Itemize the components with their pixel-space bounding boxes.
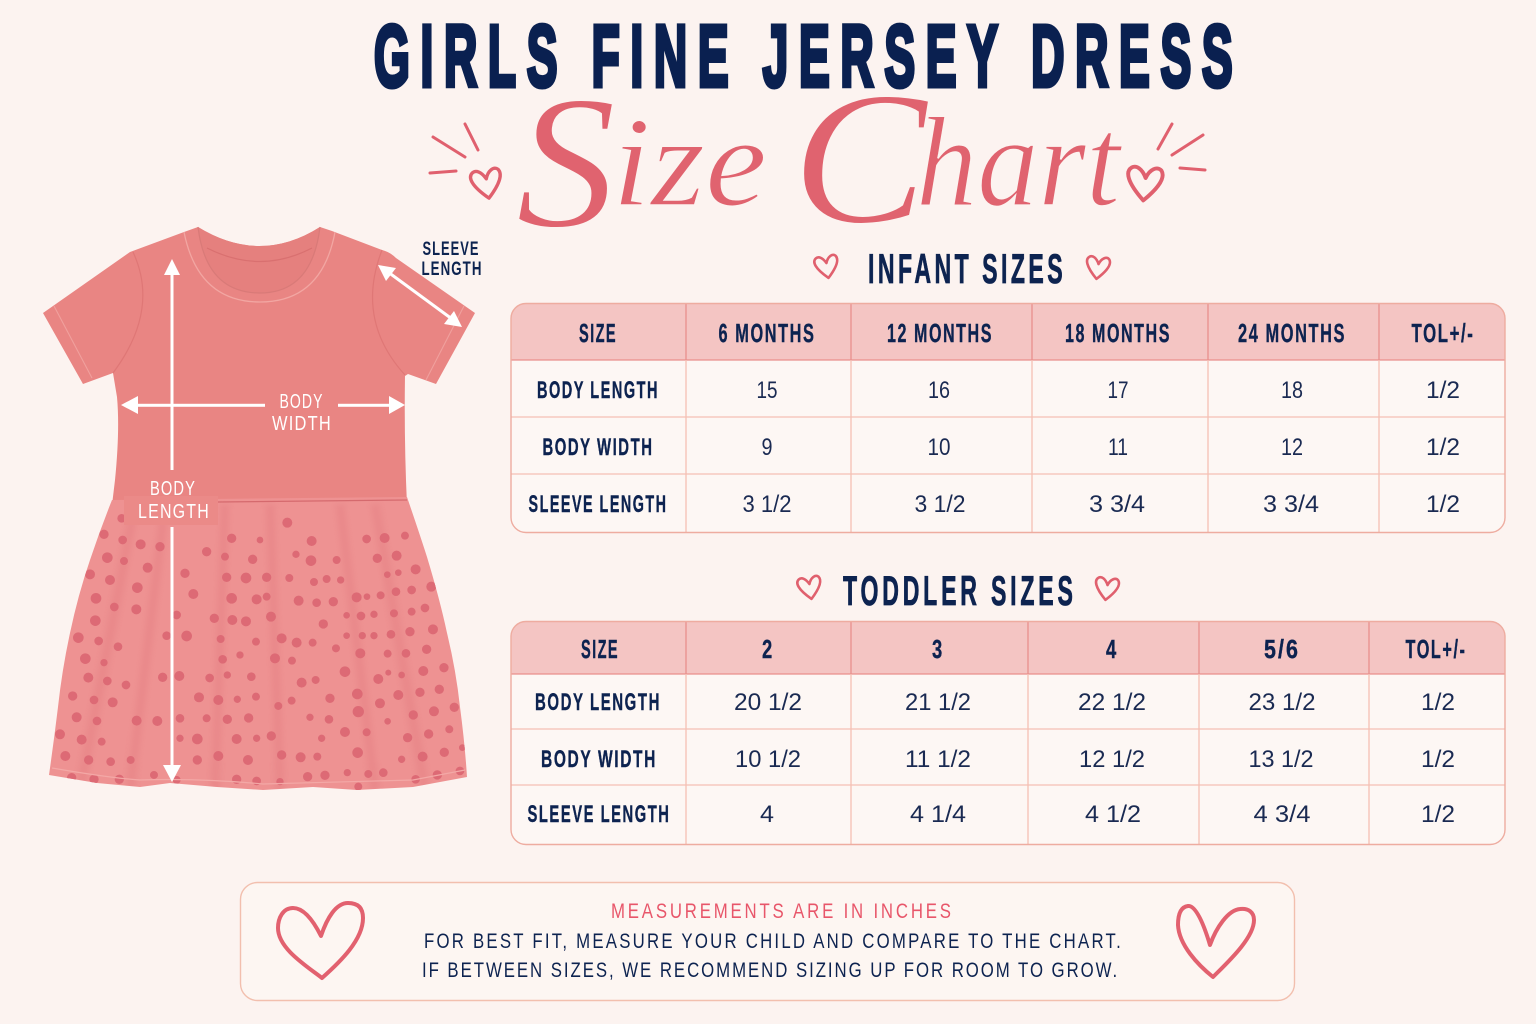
row: sleeve length: 3 3/4 <box>1263 491 1319 518</box>
icon: left sparkle strokes and heart <box>430 124 503 200</box>
row: body length: 22 1/2 <box>1078 689 1146 716</box>
subtitle: Size Chart: C <box>792 54 929 264</box>
icon: left large heart <box>278 903 363 978</box>
icon: heart left of infant heading <box>814 254 840 280</box>
header row: SIZE <box>581 634 619 664</box>
row: sleeve length <box>528 491 1460 518</box>
row: body length: 20 1/2 <box>734 689 802 716</box>
skirt folds <box>80 538 425 786</box>
title: GIRLS FINE JERSEY DRESS <box>374 7 1233 105</box>
row: sleeve length: 4 1/2 <box>1085 801 1141 828</box>
neck interior <box>198 227 320 293</box>
row: body width: 1/2 <box>1426 434 1460 461</box>
row: body length: BODY LENGTH <box>537 377 659 404</box>
row: body length: 18 <box>1281 377 1303 404</box>
row: body width <box>541 746 1455 773</box>
header row: TOL+/- <box>1406 634 1466 664</box>
header row: 5/6 <box>1264 634 1300 664</box>
row: sleeve length: 4 <box>760 801 774 828</box>
header row: 2 <box>762 634 774 664</box>
heading: toddler sizes: TODDLER SIZES <box>843 568 1073 615</box>
subtitle: Size Chart: S <box>516 58 616 268</box>
row: body width: 10 <box>928 434 950 461</box>
table: infant sizes <box>511 304 1505 532</box>
row: body width <box>542 434 1460 461</box>
row: body length: 1/2 <box>1421 689 1455 716</box>
table: toddler sizes <box>511 622 1505 844</box>
row: body width: BODY WIDTH <box>542 434 654 461</box>
skirt waist seam and hem stitch <box>218 500 407 502</box>
dress illustration <box>43 227 475 790</box>
row: sleeve length: 1/2 <box>1426 491 1460 518</box>
label: sleeve length: LENGTH <box>422 259 482 280</box>
row: body length: 16 <box>928 377 950 404</box>
row: body length: BODY LENGTH <box>535 689 661 716</box>
header row: 6 MONTHS <box>718 318 816 348</box>
sleeve seams <box>113 250 405 375</box>
header row: 18 MONTHS <box>1065 318 1171 348</box>
label: sleeve length: SLEEVE <box>422 239 480 260</box>
note headline: MEASUREMENTS ARE IN INCHES <box>611 900 951 924</box>
header row: 24 MONTHS <box>1238 318 1346 348</box>
row: sleeve length: 1/2 <box>1421 801 1455 828</box>
icon: right sparkle strokes and heart <box>1126 124 1205 202</box>
label: body width: WIDTH <box>272 413 332 435</box>
row: body width: 11 1/2 <box>905 746 971 773</box>
row: body width: BODY WIDTH <box>541 746 657 773</box>
icon: heart left of toddler heading <box>797 575 823 601</box>
icon: heart right of infant heading <box>1085 255 1111 280</box>
row: body width: 9 <box>762 434 772 461</box>
callout: measurement note <box>240 882 1294 1000</box>
header row <box>579 318 1474 348</box>
arrow: sleeve length diagonal <box>378 265 462 327</box>
row: sleeve length: 3 3/4 <box>1089 491 1145 518</box>
row: sleeve length: 4 1/4 <box>910 801 966 828</box>
row: body length: 21 1/2 <box>905 689 971 716</box>
subtitle: Size Chart: hart <box>916 91 1123 233</box>
header row: SIZE <box>579 318 617 348</box>
row: body width: 10 1/2 <box>735 746 801 773</box>
header row: TOL+/- <box>1412 318 1474 348</box>
row: body width: 13 1/2 <box>1248 746 1314 773</box>
label: sleeve length <box>422 239 482 280</box>
row: sleeve length: 4 3/4 <box>1254 801 1310 828</box>
row: body width: 11 <box>1108 434 1128 461</box>
polka dots <box>56 515 465 790</box>
row: body length: 17 <box>1108 377 1128 404</box>
label: body width <box>272 391 332 435</box>
row: body length <box>535 689 1455 716</box>
icon: heart right of toddler heading <box>1094 576 1120 601</box>
arrow: body length vertical <box>163 259 181 782</box>
row: body length <box>537 377 1460 404</box>
subtitle: Size Chart: ize <box>612 91 767 233</box>
label: body length <box>138 478 210 523</box>
label patch <box>124 496 218 525</box>
row: sleeve length: 3 1/2 <box>914 491 966 518</box>
header row: 3 <box>932 634 944 664</box>
icon: right large heart <box>1178 906 1254 977</box>
row: sleeve length: SLEEVE LENGTH <box>528 491 668 518</box>
header row: 12 MONTHS <box>887 318 993 348</box>
row: body width: 1/2 <box>1421 746 1455 773</box>
skirt <box>49 497 467 790</box>
row: sleeve length: SLEEVE LENGTH <box>528 801 670 828</box>
row: body width: 12 <box>1281 434 1303 461</box>
row: sleeve length <box>528 801 1455 828</box>
heading: infant sizes: INFANT SIZES <box>868 246 1063 293</box>
arrow: body width horizontal <box>121 396 405 414</box>
label: body width: BODY <box>280 391 324 413</box>
header row <box>581 634 1466 664</box>
row: body width: 12 1/2 <box>1079 746 1145 773</box>
header row: 4 <box>1106 634 1118 664</box>
note line one: FOR BEST FIT, MEASURE YOUR CHILD AND COMPARE TO THE CHART. <box>424 930 1121 954</box>
row: body length: 1/2 <box>1426 377 1460 404</box>
label: body length: BODY <box>150 478 196 500</box>
row: body length: 23 1/2 <box>1248 689 1316 716</box>
bodice <box>43 227 475 505</box>
row: body length: 15 <box>756 377 778 404</box>
note line two: IF BETWEEN SIZES, WE RECOMMEND SIZING UP FOR ROOM TO GROW. <box>422 959 1117 983</box>
row: sleeve length: 3 1/2 <box>742 491 792 518</box>
label: body length: LENGTH <box>138 501 210 523</box>
